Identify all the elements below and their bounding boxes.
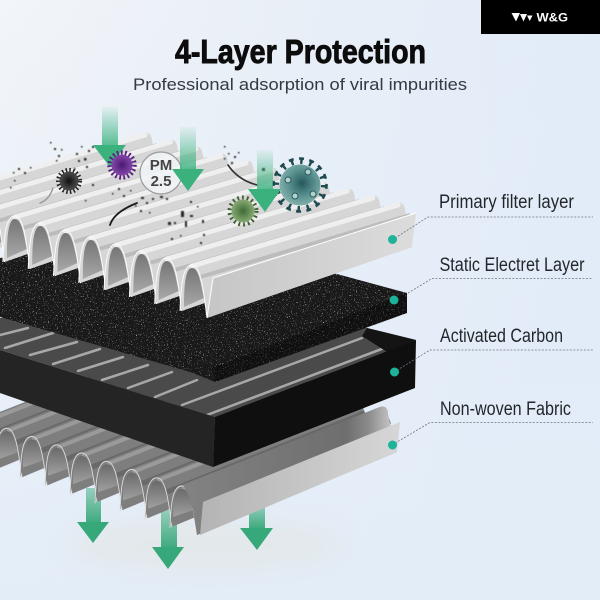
bottom airflow arrows [77, 488, 273, 569]
label: activated carbon [390, 326, 593, 376]
label: static electret layer [390, 255, 593, 304]
arrow: inflow right [248, 150, 281, 212]
layer 2: static electret foam [0, 240, 407, 382]
layer 3: activated carbon frame [0, 318, 416, 467]
label: primary filter layer: Primary filter layer [439, 192, 575, 213]
icon: green virus [230, 198, 256, 224]
logo badge [481, 0, 600, 34]
subtitle: Professional adsorption of viral impurities [133, 76, 467, 94]
arrow: outflow left [77, 488, 109, 543]
swoosh lines [40, 165, 257, 225]
label: activated carbon: Activated Carbon [440, 326, 563, 347]
PM 2.5 badge: PM [150, 157, 172, 174]
label: primary filter layer [388, 192, 593, 244]
PM 2.5 badge: 2.5 [151, 173, 171, 190]
arrow: outflow right [240, 505, 273, 550]
icon: purple virus [110, 152, 134, 178]
icon: black dust ball [58, 170, 80, 192]
dust particles [10, 142, 265, 244]
layer 4: non-woven fabric [0, 341, 400, 535]
layer 1: primary filter [0, 133, 416, 318]
arrow: inflow left [93, 107, 126, 167]
PM 2.5 badge [140, 152, 182, 194]
arrow: outflow centre [152, 510, 184, 569]
logo name: W&G [536, 10, 568, 24]
label: non-woven fabric [388, 399, 593, 450]
arrow: inflow centre [172, 127, 204, 191]
label: non-woven fabric: Non-woven Fabric [440, 399, 571, 420]
icon: logo mark [512, 13, 532, 22]
title: 4-Layer Protection [175, 33, 426, 70]
icon: teal coronavirus [274, 158, 326, 212]
